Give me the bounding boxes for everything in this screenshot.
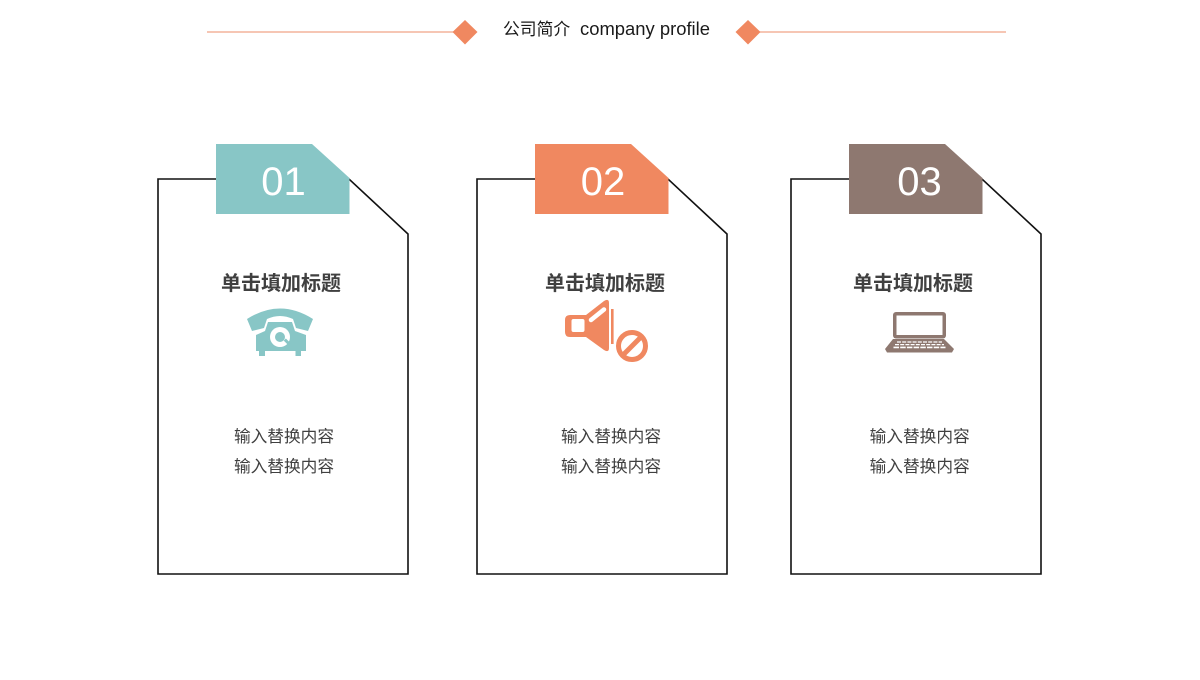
card outline [791, 179, 1041, 574]
number tab 02 [535, 144, 668, 214]
title: 公司简介 [503, 20, 570, 39]
body text: 输入替换内容 [561, 427, 661, 446]
panel: card 03 [791, 144, 1041, 574]
body text: 输入替换内容 [234, 427, 334, 446]
icon: left diamond [452, 20, 478, 44]
body text: 输入替换内容 [870, 457, 970, 476]
number tab 01: 01 [261, 160, 306, 204]
heading: 单击填加标题 [221, 272, 341, 295]
panel: card 02 [477, 144, 727, 574]
icon: telephone [247, 308, 313, 356]
icon: right diamond [736, 20, 760, 44]
number tab 03: 03 [897, 160, 942, 204]
title: company profile [580, 19, 710, 39]
heading: 单击填加标题 [545, 272, 665, 295]
card outline [477, 179, 727, 574]
body text [870, 427, 970, 476]
number tab 02: 02 [581, 160, 625, 204]
body text [234, 427, 334, 476]
icon: muted speaker [565, 300, 646, 360]
panel: card 01 [158, 144, 408, 574]
body text [561, 427, 661, 476]
body text: 输入替换内容 [561, 457, 661, 476]
number tab 01 [216, 144, 350, 214]
body text: 输入替换内容 [234, 457, 334, 476]
icon: laptop [885, 312, 954, 352]
header: company profile [207, 19, 1006, 44]
number tab 03 [849, 144, 982, 214]
heading: 单击填加标题 [853, 272, 973, 295]
card outline [158, 179, 408, 574]
body text: 输入替换内容 [870, 427, 970, 446]
